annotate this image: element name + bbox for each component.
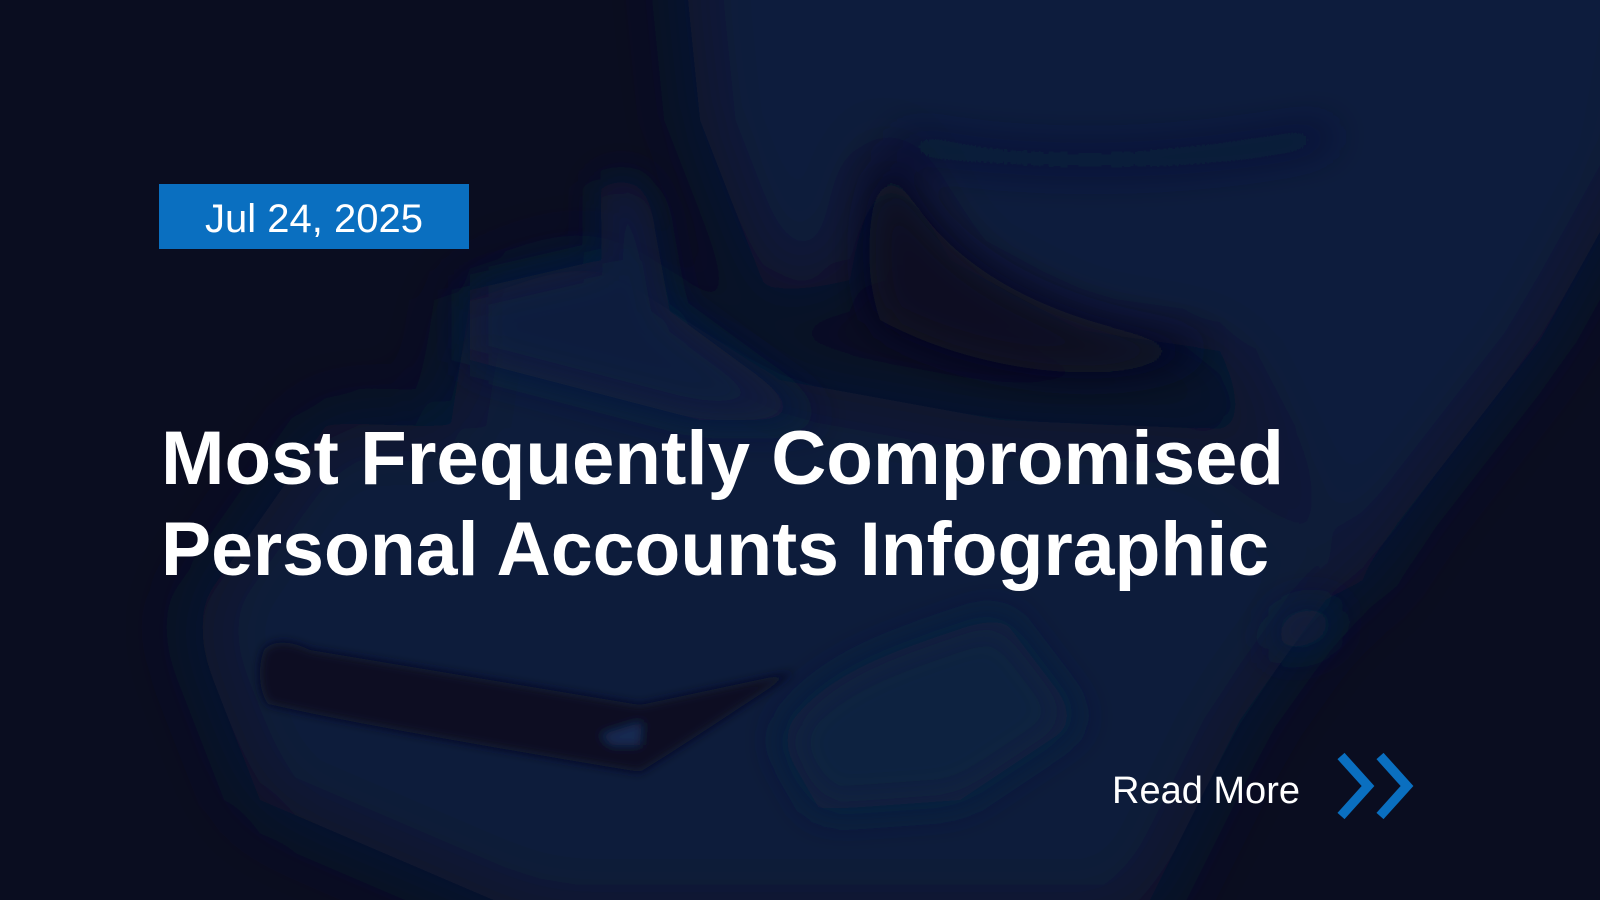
read more link label: Read More: [1112, 770, 1300, 812]
phone silhouette: [260, 642, 795, 772]
date badge: [159, 184, 469, 249]
date badge: Jul 24, 2025: [205, 197, 423, 241]
title: Personal Accounts Infographic: [161, 507, 1269, 592]
icon: double chevron arrow: [1338, 753, 1414, 819]
title: Most Frequently Compromised: [161, 416, 1284, 501]
